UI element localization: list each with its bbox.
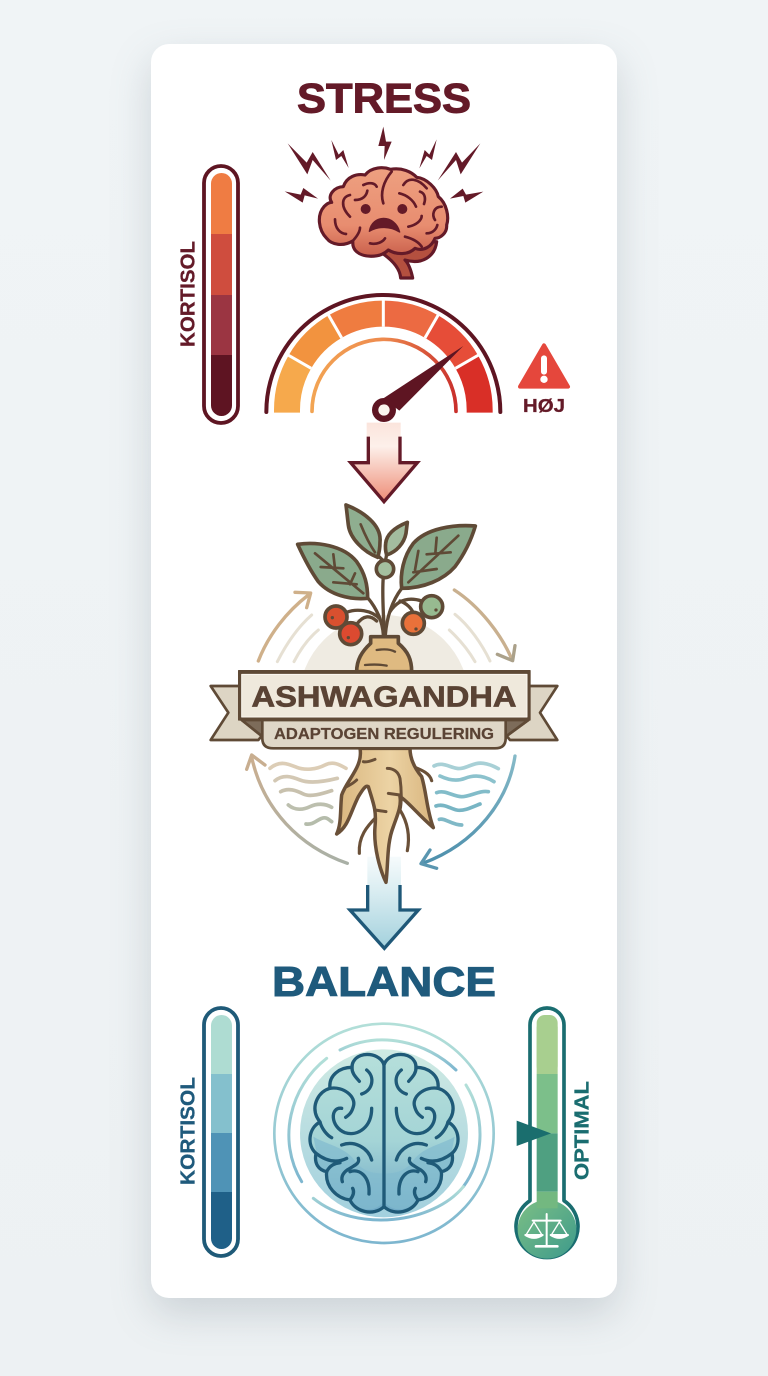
banner: main plate bbox=[239, 671, 530, 720]
subheading: ADAPTOGEN REGULERING: ADAPTOGEN REGULERING bbox=[274, 726, 494, 743]
waves: right bbox=[434, 763, 498, 825]
root: rootlets bbox=[359, 767, 432, 853]
plant: root crown bbox=[357, 637, 412, 672]
icon: lightning bolts bbox=[285, 127, 483, 203]
plant: leaves bbox=[346, 505, 380, 557]
disc bbox=[300, 1049, 468, 1217]
arrow: stress to ashwagandha bbox=[351, 423, 417, 502]
icon: upper cycle arrows bbox=[258, 590, 515, 662]
arrow: ashwagandha to balance bbox=[350, 857, 418, 948]
gauge: needle bbox=[372, 346, 463, 422]
thermometer: balanced cortisol bbox=[204, 1008, 238, 1256]
plant: bud bbox=[376, 560, 394, 578]
waves: left bbox=[270, 763, 346, 824]
label: KORTISOL (balance): KORTISOL bbox=[178, 1077, 200, 1185]
icon: warning triangle bbox=[520, 345, 568, 387]
icon: balance halo bbox=[304, 615, 464, 670]
label: OPTIMAL: OPTIMAL bbox=[572, 1081, 594, 1180]
label: HØJ: HØJ bbox=[523, 396, 565, 416]
label: KORTISOL (stress): KORTISOL bbox=[178, 241, 200, 347]
gauge: outer rim bbox=[266, 295, 500, 412]
thermometer: high cortisol bbox=[204, 166, 238, 423]
panel: card bbox=[151, 44, 617, 1298]
plant: stems bbox=[347, 554, 422, 637]
thermometer: bulb bbox=[518, 1200, 576, 1259]
icon: ashwagandha root bbox=[337, 748, 433, 882]
chart: stress gauge bbox=[266, 295, 500, 422]
icon: lower cycle arrows and waves bbox=[247, 755, 515, 868]
heading: ASHWAGANDHA: ASHWAGANDHA bbox=[252, 682, 517, 714]
gauge: colored segments bbox=[287, 314, 480, 413]
icon: scales bbox=[525, 1214, 568, 1246]
title: STRESS: STRESS bbox=[297, 74, 471, 122]
banner: subtitle plate bbox=[262, 720, 506, 748]
gauge: inner arc bbox=[312, 339, 456, 411]
title: BALANCE: BALANCE bbox=[272, 958, 496, 1005]
thermometer: optimal level bbox=[516, 1008, 578, 1259]
plant: berries bbox=[325, 596, 443, 645]
banner: ashwagandha ribbon bbox=[211, 671, 557, 748]
brain bbox=[310, 1054, 458, 1212]
rings bbox=[274, 1024, 494, 1243]
icon: calm brain with rings bbox=[274, 1024, 494, 1243]
banner: ribbon tails bbox=[211, 686, 557, 740]
icon: stressed brain bbox=[319, 168, 448, 278]
icon: ashwagandha plant bbox=[298, 505, 475, 672]
root: body bbox=[337, 748, 433, 882]
thermometer: pointer bbox=[517, 1121, 551, 1146]
